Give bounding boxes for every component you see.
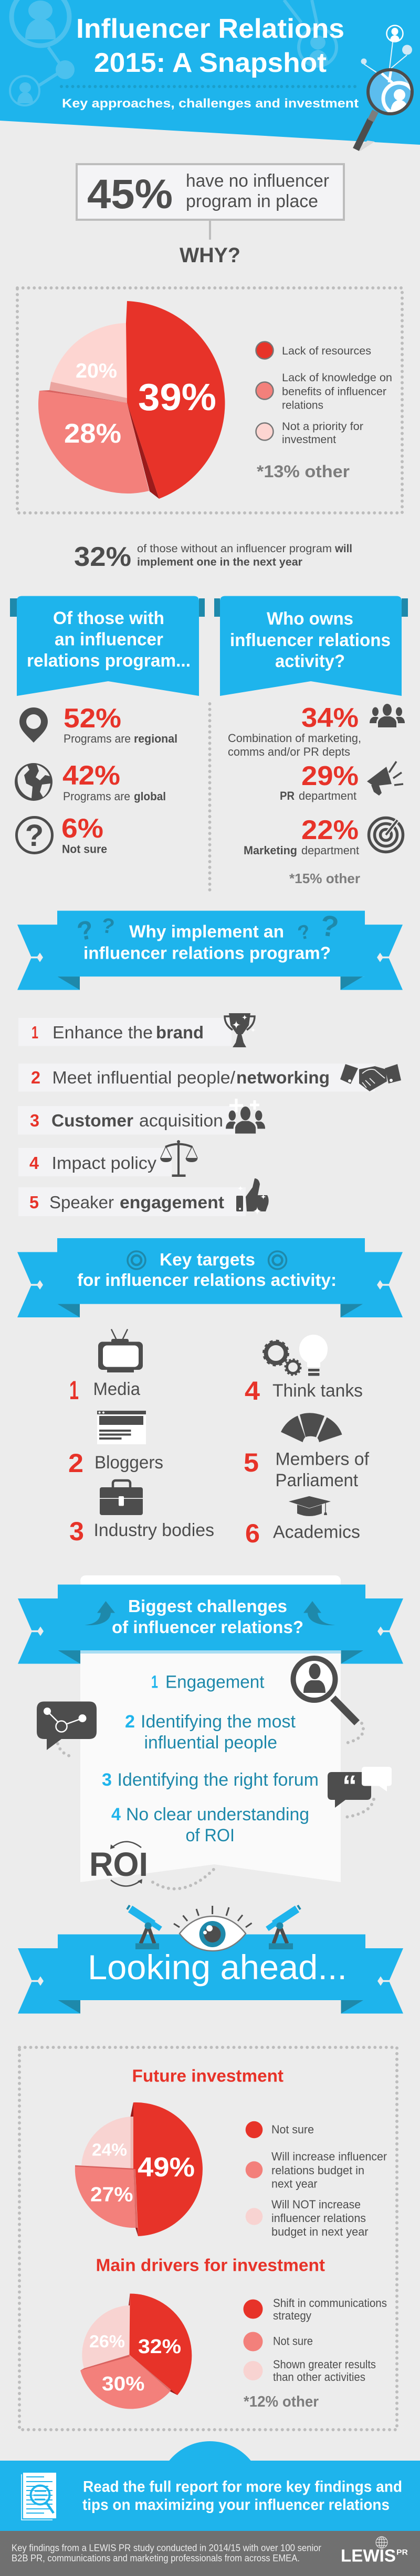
list row: 3 customer acquisition xyxy=(18,1106,236,1135)
pie chart: main drivers xyxy=(80,2294,192,2409)
stat: 52% regional xyxy=(64,703,177,745)
legend: main drivers: Shown greater results xyxy=(273,2358,376,2371)
list row: 2 meet influential people: Meet influential people/ xyxy=(52,1068,236,1087)
list: challenges: Identifying the right forum xyxy=(118,1770,319,1790)
icon: megaphone xyxy=(367,761,403,796)
list: challenges xyxy=(102,1672,319,1845)
icon: globe xyxy=(15,763,52,801)
icon: trophy xyxy=(225,1013,256,1047)
heading: main drivers: Main drivers for investment xyxy=(96,2255,325,2275)
callout: 45% have no influencer program: 45% xyxy=(87,170,173,217)
icon: eye xyxy=(174,1906,252,1951)
list row: 4 impact policy: Impact policy xyxy=(51,1153,157,1173)
stat: 52% regional: Programs are xyxy=(64,732,131,745)
list: challenges: 3 xyxy=(102,1770,112,1790)
target: 2 bloggers: Bloggers xyxy=(94,1453,163,1473)
pie chart: future investment: 49% xyxy=(138,2152,195,2183)
pie chart: future investment xyxy=(75,2102,203,2236)
title xyxy=(76,14,344,78)
legend: main drivers: strategy xyxy=(273,2309,311,2322)
note: 15% other: *15% other xyxy=(289,871,360,886)
target: 3 industry bodies: Industry bodies xyxy=(93,1520,214,1540)
title: 2015: A Snapshot xyxy=(94,48,327,78)
legend: future investment: Not sure xyxy=(271,2123,314,2136)
icon: parliament chamber xyxy=(281,1413,342,1442)
icon: question marks: ? xyxy=(100,914,116,939)
target: 1 media: 1 xyxy=(69,1376,79,1405)
heading: future investment: Future investment xyxy=(132,2066,284,2085)
list row: 5 speaker engagement xyxy=(18,1187,246,1216)
banner: looking ahead: Looking ahead... xyxy=(88,1948,347,1987)
list row: 3 customer acquisition: 3 xyxy=(30,1111,39,1130)
call to action band xyxy=(0,2441,420,2546)
icon: people group xyxy=(370,704,405,727)
icon: target rings xyxy=(128,1251,287,1269)
list row: 4 impact policy: 4 xyxy=(29,1153,39,1173)
legend: main drivers: than other activities xyxy=(273,2370,365,2384)
target: 5 members of parliament: Members of xyxy=(275,1450,370,1469)
stat: 34% combination xyxy=(228,703,361,758)
icon: location pin xyxy=(19,707,48,743)
call to action text: Read the full report for more key findings and xyxy=(83,2478,402,2495)
banner: key targets: for influencer relations activity: xyxy=(77,1270,337,1290)
target: 1 media: Media xyxy=(93,1379,140,1399)
legend: future investment: next year xyxy=(271,2177,317,2190)
pie chart: reasons: 20% xyxy=(76,360,117,382)
callout: 32% will implement xyxy=(74,542,352,572)
list row: 3 customer acquisition: acquisition xyxy=(139,1111,223,1130)
stat: 52% regional: regional xyxy=(134,732,177,745)
target: 3 industry bodies xyxy=(69,1480,214,1546)
target: 3 industry bodies: 3 xyxy=(69,1517,84,1546)
icon: ROI xyxy=(89,1842,217,1889)
legend: future investment: influencer relations xyxy=(271,2212,366,2225)
banner: biggest challenges xyxy=(18,1585,403,1663)
stat: 29% PR department: department xyxy=(299,789,356,802)
icon: briefcase xyxy=(100,1480,143,1515)
legend: future investment xyxy=(246,2121,387,2238)
call to action text xyxy=(82,2478,402,2514)
target: 4 think tanks: Think tanks xyxy=(272,1381,363,1401)
header band xyxy=(0,0,420,151)
stat: 52% regional: 52% xyxy=(64,703,121,734)
icon: report document xyxy=(22,2473,56,2520)
logo: LEWIS PR: PR xyxy=(396,2548,408,2557)
subtitle: Key approaches, challenges and investment xyxy=(62,96,359,111)
stat: 29% PR department: PR xyxy=(280,789,295,802)
banner: of those with: Of those with xyxy=(53,608,164,628)
callout: 45% have no influencer program xyxy=(77,164,344,220)
icon: question marks: ? xyxy=(318,908,341,943)
target: 1 media xyxy=(69,1329,143,1405)
list: challenges: influential people xyxy=(144,1733,277,1753)
callout: 45% have no influencer program: program in place xyxy=(186,191,318,211)
stat: 29% PR department xyxy=(280,761,359,802)
list row: 4 impact policy xyxy=(18,1148,172,1176)
banner: key targets xyxy=(17,1238,403,1317)
icon: handshake xyxy=(340,1064,401,1091)
pie chart: future investment: 27% xyxy=(90,2184,133,2206)
target: 4 think tanks xyxy=(245,1335,363,1405)
banner: of those with: an influencer xyxy=(55,629,163,649)
panel: reasons for no program xyxy=(17,288,402,513)
pie chart: main drivers: 30% xyxy=(102,2373,145,2395)
icon: people group with plus signs xyxy=(226,1099,265,1134)
list: challenges: Identifying the most xyxy=(141,1712,296,1732)
list row: 1 enhance the brand: Enhance the xyxy=(52,1023,153,1042)
call to action text: tips on maximizing your influencer relations xyxy=(82,2496,390,2514)
stat: 42% global: 42% xyxy=(62,760,120,791)
callout: 45% have no influencer program: have no influencer xyxy=(186,171,329,191)
icon: background influencer network xyxy=(10,0,337,105)
icon: television xyxy=(98,1329,143,1372)
pie chart: main drivers: 26% xyxy=(89,2332,125,2351)
icon: browser window xyxy=(97,1411,146,1444)
icon: target xyxy=(369,818,403,852)
banner: why implement a program: influencer relations program? xyxy=(83,943,331,963)
callout: 32% will implement: 32% xyxy=(74,542,131,572)
banner: biggest challenges: Biggest challenges xyxy=(128,1596,287,1616)
banner: who owns: influencer relations xyxy=(230,630,391,650)
list: challenges: of ROI xyxy=(186,1826,235,1845)
stat: 22% marketing department: 22% xyxy=(301,815,359,845)
legend: main drivers xyxy=(244,2296,387,2410)
target: 4 think tanks: 4 xyxy=(245,1376,260,1405)
icon: magnifying glass with person xyxy=(293,1658,363,1743)
stat: 22% marketing department: Marketing xyxy=(244,844,297,857)
legend: reasons xyxy=(256,342,392,481)
icon: question marks: ? xyxy=(75,915,96,947)
icon: graduation cap xyxy=(288,1496,332,1516)
banner: who owns: activity? xyxy=(275,651,345,671)
legend: reasons: investment xyxy=(282,433,336,446)
icon: quote bubbles: “ xyxy=(342,1769,357,1802)
legend: reasons: relations xyxy=(282,399,323,411)
legend: main drivers: Not sure xyxy=(273,2335,313,2347)
source note: Key findings from a LEWIS PR study conducted in 2014/15 with over 100 senior xyxy=(12,2542,321,2553)
stat: 6% not sure: 6% xyxy=(61,813,103,844)
pie chart: main drivers: 32% xyxy=(138,2336,181,2358)
stat: 42% global xyxy=(62,760,166,803)
list row: 2 meet influential people: 2 xyxy=(31,1068,40,1087)
legend: main drivers: *12% other xyxy=(244,2393,319,2410)
banner: biggest challenges: of influencer relations? xyxy=(112,1617,303,1637)
list row: 1 enhance the brand: brand xyxy=(156,1023,204,1042)
banner: who owns xyxy=(214,596,408,696)
source note: B2B PR, communications and marketing professionals from across EMEA. xyxy=(12,2553,300,2563)
stat: 42% global: global xyxy=(134,790,166,803)
icon: question marks xyxy=(75,908,341,947)
stat: 42% global: Programs are xyxy=(63,790,130,803)
target: 2 bloggers xyxy=(68,1411,163,1478)
target: 5 members of parliament xyxy=(244,1413,370,1490)
legend: main drivers: Shift in communications xyxy=(273,2296,387,2310)
list row: 1 enhance the brand xyxy=(18,1018,232,1046)
legend: reasons: *13% other xyxy=(257,462,350,481)
pie chart: future investment: 24% xyxy=(92,2140,127,2160)
banner: key targets: Key targets xyxy=(160,1250,255,1269)
stat: 22% marketing department xyxy=(244,815,359,857)
legend: future investment: Will increase influencer xyxy=(271,2150,387,2163)
icon: magnifying glass over network xyxy=(356,25,415,151)
stat: 29% PR department: 29% xyxy=(301,761,359,791)
title: Influencer Relations xyxy=(76,14,344,44)
icon: thumbs up xyxy=(236,1178,269,1216)
list row: 1 enhance the brand: 1 xyxy=(32,1023,38,1042)
icon: ROI: ROI xyxy=(89,1845,148,1883)
panel: future investment and drivers xyxy=(19,2047,397,2430)
icon: speech bubble with network xyxy=(37,1701,97,1757)
legend: reasons: Not a priority for xyxy=(282,420,363,433)
icon: question mark: ? xyxy=(25,819,44,853)
stat: 34% combination: Combination of marketing, xyxy=(228,732,361,745)
list: challenges: 2 xyxy=(125,1712,135,1732)
pie chart: reasons xyxy=(38,301,225,499)
icon: telescope right xyxy=(267,1905,300,1949)
banner: why implement a program xyxy=(17,908,403,990)
icon: curved arrows xyxy=(85,1601,335,1625)
callout: 32% will implement: implement one in the next year xyxy=(137,556,303,568)
callout: 32% will implement: of those without an influencer program xyxy=(137,542,332,555)
target: 5 members of parliament: 5 xyxy=(244,1448,259,1477)
list row: 5 speaker engagement: 5 xyxy=(29,1193,39,1212)
target: 6 academics: Academics xyxy=(273,1522,360,1542)
icon: scales xyxy=(160,1140,197,1177)
list: challenges: Engagement xyxy=(165,1672,265,1692)
banner: looking ahead xyxy=(18,1905,403,2014)
list row: 2 meet influential people: networking xyxy=(236,1068,330,1087)
icon: gears and light bulb xyxy=(264,1335,328,1376)
legend: reasons: benefits of influencer xyxy=(282,385,386,398)
logo: LEWIS PR xyxy=(341,2537,408,2566)
banner: of those with xyxy=(10,596,205,696)
stat: 22% marketing department: department xyxy=(301,844,359,857)
icon: question mark xyxy=(17,817,52,853)
banner: of those with: relations program... xyxy=(27,651,191,671)
icon: telescope left xyxy=(127,1905,161,1949)
panel: who owns influencer relations xyxy=(214,596,408,886)
target: 6 academics xyxy=(245,1496,360,1548)
footer xyxy=(0,2531,420,2576)
banner: who owns: Who owns xyxy=(267,609,353,629)
list row: 2 meet influential people xyxy=(18,1064,375,1092)
list row: 3 customer acquisition: Customer xyxy=(51,1111,133,1130)
list: challenges: 4 xyxy=(111,1805,121,1824)
target: 6 academics: 6 xyxy=(245,1519,260,1548)
legend: future investment: relations budget in xyxy=(271,2164,364,2177)
heading: WHY?: WHY? xyxy=(180,244,240,267)
legend: future investment: budget in next year xyxy=(271,2225,369,2238)
stat: 34% combination: comms and/or PR depts xyxy=(228,745,350,758)
source note xyxy=(12,2542,321,2563)
stat: 6% not sure: Not sure xyxy=(62,842,107,856)
list row: 5 speaker engagement: Speaker xyxy=(49,1193,114,1212)
panel: of those with a program xyxy=(10,596,205,856)
stat: 34% combination: 34% xyxy=(301,703,359,733)
target: 5 members of parliament: Parliament xyxy=(275,1471,359,1490)
panel: biggest challenges xyxy=(18,1575,403,1889)
list: challenges: 1 xyxy=(151,1672,158,1692)
pie chart: reasons: 39% xyxy=(138,377,216,418)
list row: 5 speaker engagement: engagement xyxy=(120,1193,224,1212)
pie chart: reasons: 28% xyxy=(64,418,121,449)
logo: LEWIS PR: LEWIS xyxy=(341,2546,396,2566)
icon: quote bubbles xyxy=(328,1767,392,1817)
list: challenges: No clear understanding xyxy=(126,1805,309,1824)
icon: question marks: ? xyxy=(296,920,312,945)
stat: 6% not sure xyxy=(61,813,107,856)
callout: 32% will implement: will xyxy=(334,542,352,555)
legend: future investment: Will NOT increase xyxy=(271,2198,361,2211)
target: 2 bloggers: 2 xyxy=(68,1448,83,1478)
legend: reasons: Lack of resources xyxy=(282,345,371,357)
legend: reasons: Lack of knowledge on xyxy=(282,371,392,384)
banner: why implement a program: Why implement an xyxy=(129,922,284,941)
